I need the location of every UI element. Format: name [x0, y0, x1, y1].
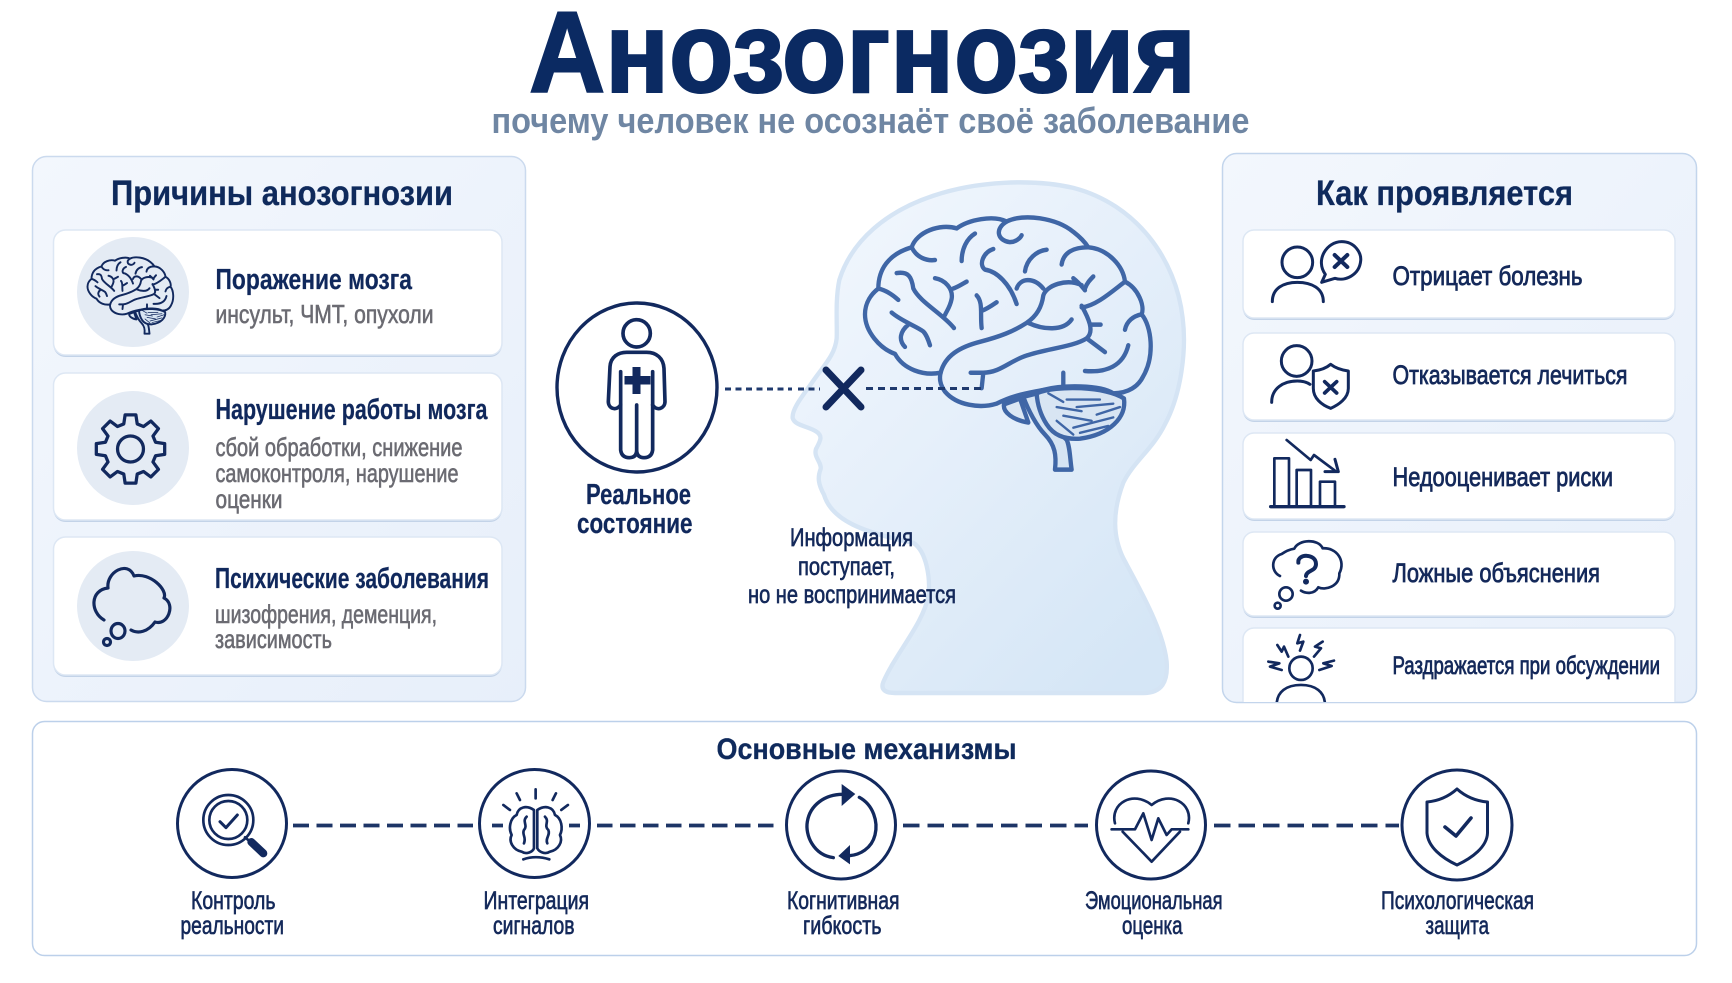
label: psychological defence	[1381, 887, 1534, 940]
icon: shield with check	[1427, 789, 1488, 865]
panel: causes	[32, 156, 526, 702]
label: cognitive flexibility: Когнитивная	[787, 887, 900, 915]
caption: information arrives: но не воспринимается	[748, 581, 956, 609]
label: emotional assessment: оценка	[1122, 912, 1183, 940]
label: psychological defence: защита	[1426, 912, 1489, 940]
text: brain dysfunction: самоконтроля, нарушение	[216, 458, 458, 488]
person icon: real state	[557, 303, 717, 472]
label: cognitive flexibility	[787, 887, 900, 940]
label: cognitive flexibility: гибкость	[803, 912, 882, 940]
label: psychological defence: Психологическая	[1381, 887, 1534, 915]
heading: main mechanisms: Основные механизмы	[716, 733, 1016, 766]
card: mental illness	[54, 537, 502, 677]
heading: manifestations: Как проявляется	[1316, 174, 1573, 213]
text: false explanations: Ложные объяснения	[1392, 558, 1600, 588]
mechanism: signal integration	[480, 770, 590, 940]
heading: causes: Причины анозогнозии	[111, 174, 453, 213]
text: refuses treatment: Отказывается лечиться	[1392, 360, 1628, 390]
mechanism: cognitive flexibility	[786, 771, 900, 940]
label: emotional assessment	[1085, 887, 1222, 940]
text: brain damage	[216, 264, 434, 329]
card: underestimates risks	[1243, 433, 1675, 521]
text: denies illness: Отрицает болезнь	[1392, 261, 1582, 291]
label: signal integration: Интеграция	[484, 887, 589, 915]
text: brain damage: Поражение мозга	[216, 264, 413, 296]
label: signal integration	[484, 887, 589, 940]
card: denies illness	[1243, 230, 1675, 320]
text: brain dysfunction	[216, 394, 488, 514]
mechanism: emotional assessment	[1085, 771, 1222, 940]
caption: information arrives: Информация	[790, 524, 913, 552]
text: brain dysfunction: Нарушение работы мозга	[216, 394, 488, 426]
icon: cycle arrows	[807, 784, 876, 864]
card: false explanations	[1243, 532, 1675, 618]
text: brain dysfunction: оценки	[216, 484, 282, 514]
icon: magnifier with check	[203, 795, 263, 853]
card: brain damage	[54, 230, 502, 357]
mechanism: psychological defence	[1381, 770, 1534, 940]
label: reality control	[180, 887, 284, 940]
connector: dashed chain	[293, 824, 1399, 827]
card: refuses treatment	[1243, 333, 1675, 422]
subtitle: почему человек не осознаёт своё заболевание	[492, 100, 1250, 141]
text: mental illness: Психические заболевания	[215, 563, 489, 595]
card: brain dysfunction	[54, 373, 502, 522]
panel: manifestations	[1222, 154, 1696, 723]
label: reality control: Контроль	[191, 887, 276, 915]
panel: main mechanisms	[32, 722, 1696, 956]
icon: person with speech bubble	[1272, 242, 1361, 302]
icon: gear	[77, 391, 189, 505]
icon: glowing brain	[503, 789, 568, 859]
icon: heart with pulse	[1112, 799, 1189, 862]
icon: brain	[77, 237, 189, 347]
text: mental illness: зависимость	[215, 624, 332, 654]
icon: person with shield	[1272, 346, 1348, 408]
label: emotional assessment: Эмоциональная	[1085, 887, 1222, 915]
label: real state: Реальное	[586, 479, 691, 511]
icon: question cloud	[1273, 541, 1342, 609]
label: real state	[577, 479, 692, 540]
text: mental illness	[215, 563, 489, 654]
text: underestimates risks: Недооценивает риски	[1392, 462, 1613, 492]
card: irritated when discussed	[1242, 628, 1676, 702]
head silhouette	[793, 182, 1184, 693]
label: reality control: реальности	[180, 912, 284, 940]
text: brain damage: инсульт, ЧМТ, опухоли	[216, 299, 434, 329]
label: signal integration: сигналов	[493, 912, 574, 940]
icon: irritated person	[1268, 635, 1334, 705]
icon: falling chart	[1271, 440, 1344, 507]
mechanism: reality control	[178, 770, 286, 940]
label: real state: состояние	[577, 508, 692, 540]
caption: information arrives: поступает,	[798, 553, 895, 581]
arrow: blocked information path	[725, 370, 985, 407]
text: mental illness: шизофрения, деменция,	[215, 599, 437, 629]
caption: information arrives	[748, 524, 956, 609]
brain illustration	[865, 217, 1151, 470]
icon: thought cloud	[77, 551, 189, 661]
text: brain dysfunction: сбой обработки, снижение	[216, 432, 462, 462]
